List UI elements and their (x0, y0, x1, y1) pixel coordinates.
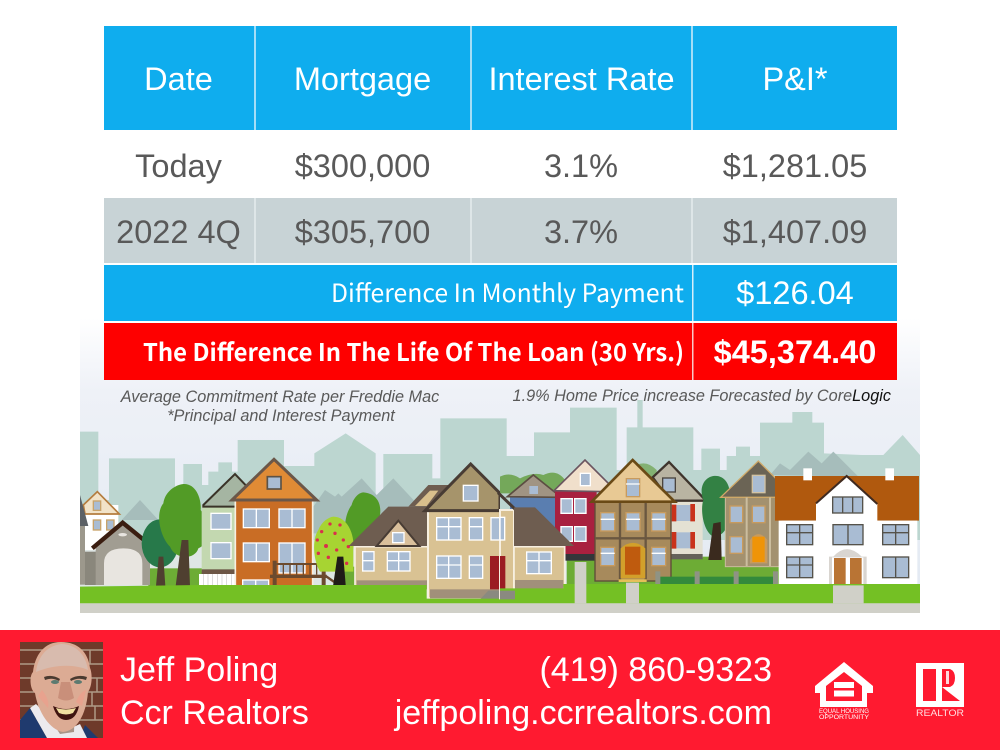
orange house (235, 498, 313, 588)
icon: equal housing opportunity: OPPORTUNITY (819, 714, 870, 721)
row: today: Today (135, 148, 223, 184)
table header (104, 26, 897, 130)
website: jeffpoling.ccrrealtors.com (394, 694, 772, 732)
table header: P&I* (762, 61, 828, 97)
blue house (510, 495, 557, 535)
row: life of the loan (104, 323, 897, 380)
tan big house (408, 485, 448, 507)
row: today: $1,281.05 (723, 148, 867, 184)
table header: Date (144, 61, 213, 97)
front tan house base (500, 591, 515, 599)
back grass (567, 557, 780, 587)
row: monthly difference: Difference In Monthly Payment (331, 274, 685, 310)
icon: realtor logo (916, 663, 964, 719)
agent name: Jeff Poling (120, 651, 278, 689)
dark tree (702, 476, 730, 537)
table header: Interest Rate (488, 61, 675, 97)
row: 2022 4Q: 3.7% (544, 214, 618, 250)
footnote: source of rate: Average Commitment Rate per Freddie Mac (120, 388, 439, 406)
row: today: $300,000 (295, 148, 430, 184)
olive house (725, 497, 782, 567)
row: today (104, 132, 897, 197)
cream striped house (670, 499, 703, 558)
row: monthly difference (104, 265, 897, 321)
tan house remainder and brown roof (500, 510, 514, 598)
trees left (142, 519, 178, 567)
company name: Ccr Realtors (120, 694, 309, 732)
left half of neighborhood (80, 418, 504, 613)
footer band (0, 630, 1000, 750)
red house (555, 491, 597, 554)
white house (775, 476, 919, 521)
white small house (85, 505, 118, 550)
tan window house (595, 502, 671, 581)
fruit tree and tree (345, 492, 380, 543)
row: 2022 4Q: $305,700 (295, 214, 430, 250)
hedge (656, 577, 778, 586)
brown roof house (355, 547, 428, 589)
row: 2022 4Q: $1,407.09 (723, 214, 867, 250)
row: today: 3.1% (544, 148, 618, 184)
table (104, 26, 897, 380)
green house (202, 505, 238, 572)
row: life of the loan: $45,374.40 (714, 334, 876, 370)
footnote: principal and interest: *Principal and Interest Payment (167, 407, 396, 425)
back grass left (148, 568, 203, 587)
icon: equal housing opportunity: EQUAL HOUSING (819, 709, 869, 715)
lawn (80, 585, 500, 603)
agent photo (20, 642, 103, 738)
table header: Mortgage (294, 61, 431, 97)
row: life of the loan: The Difference In The Life Of The Loan (30 Yrs.) (143, 334, 684, 369)
phone number: (419) 860-9323 (539, 651, 772, 689)
illustration: neighborhood street (80, 318, 920, 613)
icon: equal housing opportunity (815, 662, 873, 721)
right half of neighborhood (498, 400, 920, 613)
porch (270, 561, 327, 589)
icon: realtor logo: REALTOR (916, 708, 964, 719)
row: 2022 4Q: 2022 4Q (116, 214, 241, 250)
row: monthly difference: $126.04 (736, 275, 854, 311)
garage (96, 525, 150, 585)
lawn (500, 584, 920, 603)
footnote: price forecast: 1.9% Home Price increase Forecasted by CoreLogic (513, 387, 891, 405)
row: 2022 4Q (104, 198, 897, 263)
